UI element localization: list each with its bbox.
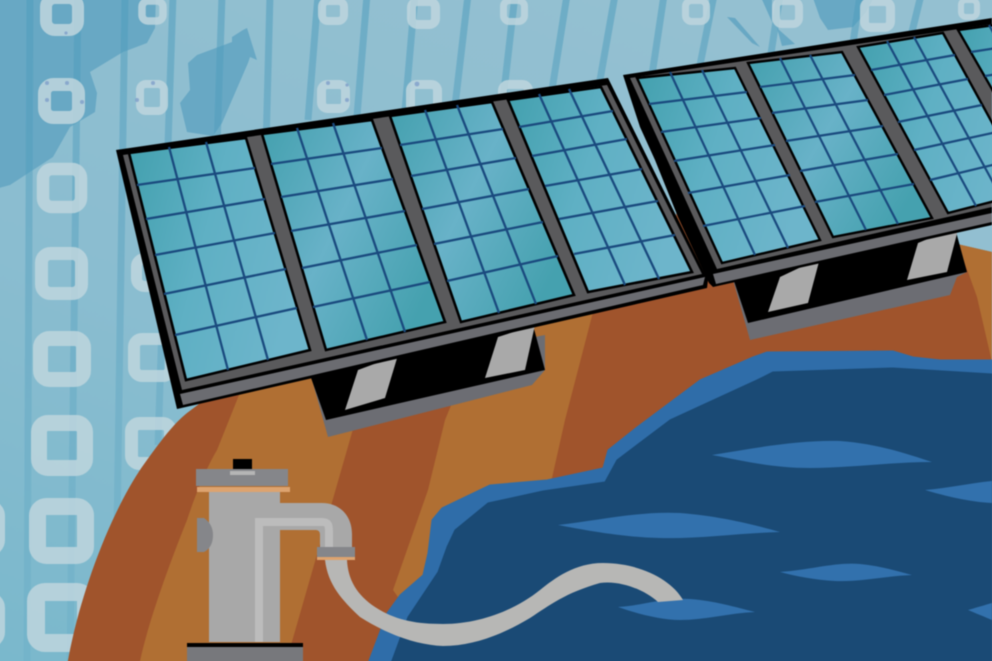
right array module 3 <box>858 33 992 213</box>
left array module 1 <box>129 138 310 380</box>
spout highlight <box>259 522 329 642</box>
right array module 1 <box>637 68 820 263</box>
left array module 4 <box>508 87 692 292</box>
pump spout arm <box>280 503 352 547</box>
collar trim <box>317 557 355 560</box>
right array frame <box>623 18 992 287</box>
left array inner frame <box>123 85 702 390</box>
world map landmasses <box>0 0 875 189</box>
ground light stripes <box>139 244 992 661</box>
lid knob <box>233 459 252 469</box>
water ripples <box>558 441 992 620</box>
earth ground <box>67 213 992 661</box>
deep water <box>390 368 992 661</box>
panel mount: left support <box>310 325 545 437</box>
left array frame <box>116 78 708 409</box>
side knob <box>197 518 213 552</box>
left array module 3 <box>390 102 574 322</box>
right array module 2 <box>748 52 932 237</box>
right array inner frame <box>630 24 992 269</box>
panel mount: right support <box>733 226 967 340</box>
sliver of ground between arrays <box>676 213 704 292</box>
water pump <box>187 459 683 661</box>
solar array: left <box>116 78 708 409</box>
base top edge <box>187 643 303 647</box>
right array module 4 <box>958 16 992 190</box>
solar array: right <box>623 16 992 287</box>
lid highlight <box>230 471 255 475</box>
pump base <box>187 647 303 661</box>
spout collar <box>317 547 355 557</box>
lake water <box>367 351 992 661</box>
small specks on squares <box>45 31 419 104</box>
left array module 2 <box>262 120 445 350</box>
lid trim <box>197 487 290 492</box>
pump body <box>209 492 280 642</box>
pump lid <box>196 469 288 486</box>
right array lower rail <box>713 213 992 284</box>
hose <box>325 560 683 646</box>
left array lower rail <box>180 277 705 405</box>
